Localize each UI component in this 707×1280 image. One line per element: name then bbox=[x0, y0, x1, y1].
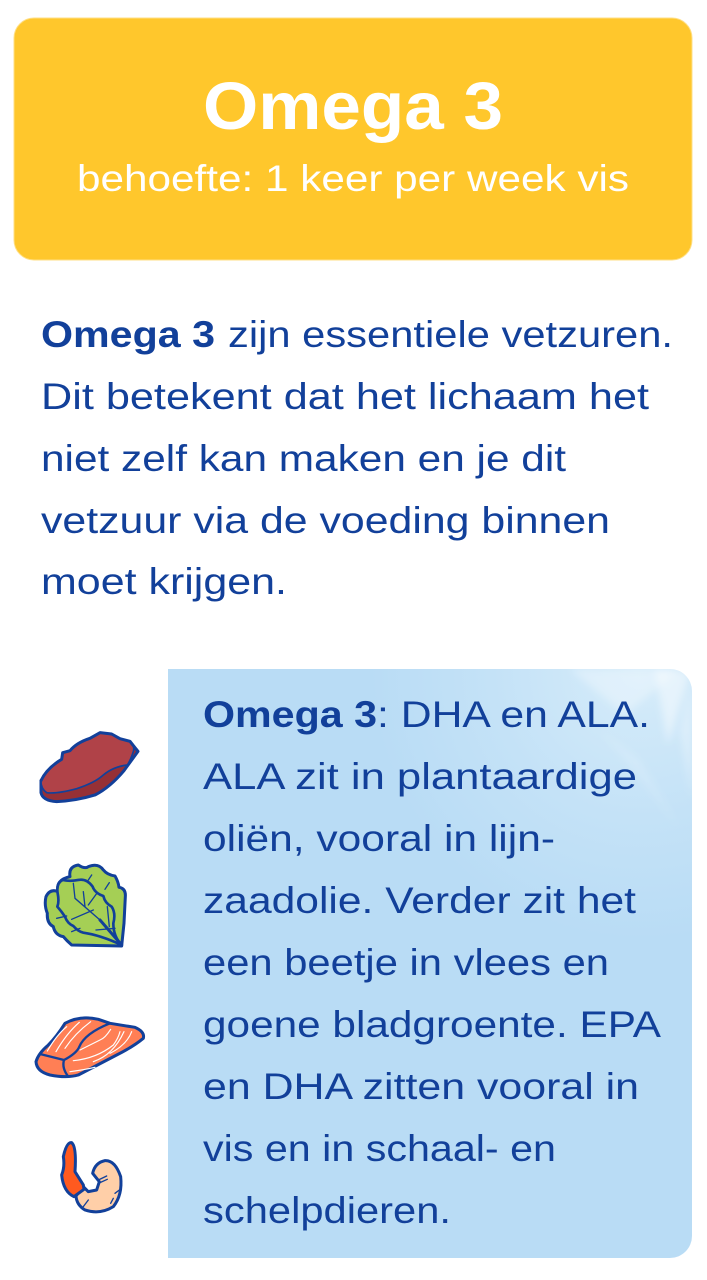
icon: meat bbox=[41, 733, 138, 802]
intro paragraph: zijn essentiele vetzuren. bbox=[228, 313, 673, 355]
intro paragraph: Dit betekent dat het lichaam het bbox=[41, 375, 650, 417]
panel text: oliën, vooral in lijn- bbox=[203, 817, 555, 859]
intro paragraph: niet zelf kan maken en je dit bbox=[41, 437, 567, 479]
intro paragraph: moet krijgen. bbox=[41, 560, 287, 602]
title: Omega 3 bbox=[203, 69, 503, 144]
subtitle: behoefte: 1 keer per week vis bbox=[77, 157, 629, 199]
panel text: goene bladgroente. EPA bbox=[203, 1003, 661, 1045]
panel text: ALA zit in plantaardige bbox=[203, 755, 637, 797]
panel text: een beetje in vlees en bbox=[203, 941, 609, 983]
intro paragraph: Omega 3 bbox=[41, 313, 215, 355]
panel: omega 3 details bbox=[168, 669, 692, 1258]
intro paragraph bbox=[41, 313, 673, 602]
icon: salmon fillet bbox=[36, 1018, 144, 1077]
panel text: vis en in schaal- en bbox=[203, 1127, 556, 1169]
panel text: Omega 3 bbox=[203, 693, 377, 735]
panel text: schelpdieren. bbox=[203, 1189, 451, 1231]
panel text: zaadolie. Verder zit het bbox=[203, 879, 637, 921]
panel text bbox=[203, 693, 661, 1231]
intro paragraph: vetzuur via de voeding binnen bbox=[41, 499, 610, 541]
icon: shrimp bbox=[62, 1143, 121, 1212]
icon: lettuce leaf bbox=[45, 865, 125, 946]
header banner bbox=[14, 18, 692, 260]
panel text: : DHA en ALA. bbox=[377, 693, 650, 735]
panel text: en DHA zitten vooral in bbox=[203, 1065, 639, 1107]
